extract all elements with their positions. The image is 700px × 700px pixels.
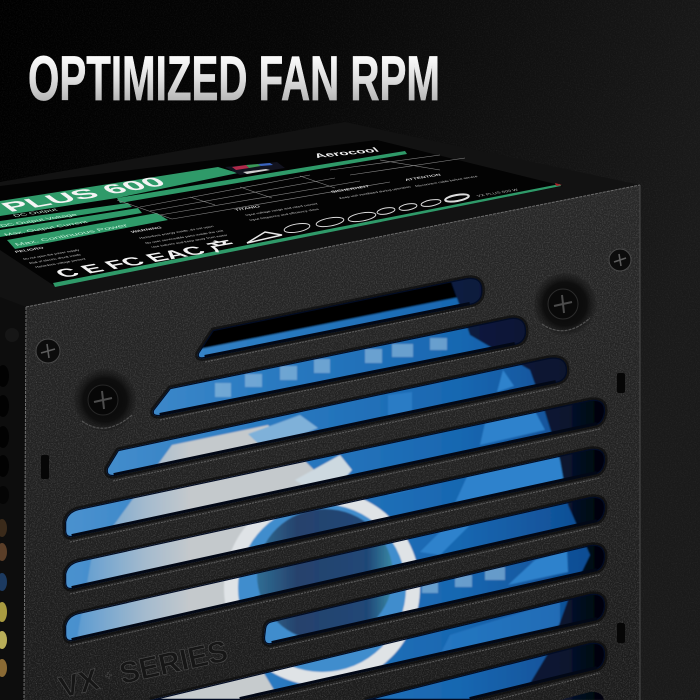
green thin top stripe xyxy=(117,151,407,203)
warning text blocks: Disconnect cable before service xyxy=(414,175,479,188)
slot lower lips xyxy=(70,307,600,700)
panel: left side face xyxy=(0,297,26,700)
plate right edge xyxy=(639,185,641,700)
warning text blocks: Use indoors and keep away from water xyxy=(150,234,229,249)
row label: output current: Max. Output Current xyxy=(2,220,91,237)
screw: top right small xyxy=(609,249,631,271)
green row: max output current xyxy=(0,208,142,237)
panel: front plate xyxy=(24,185,640,700)
warning text blocks: WARNING xyxy=(130,226,163,234)
green bottom line xyxy=(53,184,561,287)
warning text blocks: ATTENTION xyxy=(404,173,443,182)
embossed logo: SERIES: SERIES xyxy=(116,635,231,691)
icon: triangle mark xyxy=(247,232,282,243)
screw: recessed right xyxy=(534,273,596,335)
specification table xyxy=(117,155,465,219)
slot outer shadows xyxy=(65,278,605,700)
warning text blocks: SICHERHEIT xyxy=(330,185,372,194)
warning text blocks: Hazardous voltage present xyxy=(34,258,87,269)
row label: output voltage: DC Output Voltage xyxy=(0,212,79,228)
warning text blocks: PELIGRO xyxy=(14,246,45,254)
plate texture xyxy=(24,185,640,700)
icon row: certification ellipses xyxy=(284,193,469,234)
fan artwork xyxy=(65,278,604,700)
row label: continuous power: Max. Continuous Power xyxy=(13,223,130,247)
embossed logo: plus: + xyxy=(104,668,114,683)
warning text blocks xyxy=(14,173,479,269)
screw: left small xyxy=(36,339,60,363)
warning text blocks: Hazardous energy inside, do not open xyxy=(138,225,214,240)
row label: DC output: DC Output xyxy=(11,207,60,218)
side vent holes and cables xyxy=(0,328,19,677)
panel: specification label xyxy=(0,140,563,287)
warning text blocks: Input frequency and efficiency class xyxy=(248,208,320,222)
slot bottom shadows xyxy=(72,305,597,700)
warning text blocks: Input voltage range and rated current xyxy=(244,202,320,217)
green row: max continuous power xyxy=(7,213,168,249)
panel: PSU top surface xyxy=(0,122,640,307)
warning text blocks: Do not open the power supply xyxy=(22,249,80,261)
warning text blocks: TITANIO xyxy=(234,205,261,212)
certification marks: C E FC EAC 产 xyxy=(49,237,243,280)
plate top edge highlight xyxy=(24,185,640,700)
warning text blocks: Keep unit ventilated during operation xyxy=(338,186,412,200)
warning text blocks: No user serviceable parts inside the unit xyxy=(144,229,225,245)
product name: PLUS 600 xyxy=(0,174,172,215)
screw: recessed left xyxy=(74,369,136,431)
small slits in plate xyxy=(41,373,625,643)
slot inner edges xyxy=(65,278,605,700)
green product band xyxy=(0,167,238,216)
warning text blocks: Risk of electric shock inside xyxy=(28,253,82,265)
title: OPTIMIZED FAN RPM xyxy=(28,44,440,114)
model small text: VX PLUS 600 W xyxy=(476,188,520,198)
panel: fan seen through vent slots xyxy=(65,278,605,700)
red corner mark xyxy=(555,183,562,186)
green row: DC output voltage xyxy=(0,203,132,228)
RGB badge xyxy=(225,162,285,175)
brand logo: Aerocool xyxy=(311,146,381,160)
